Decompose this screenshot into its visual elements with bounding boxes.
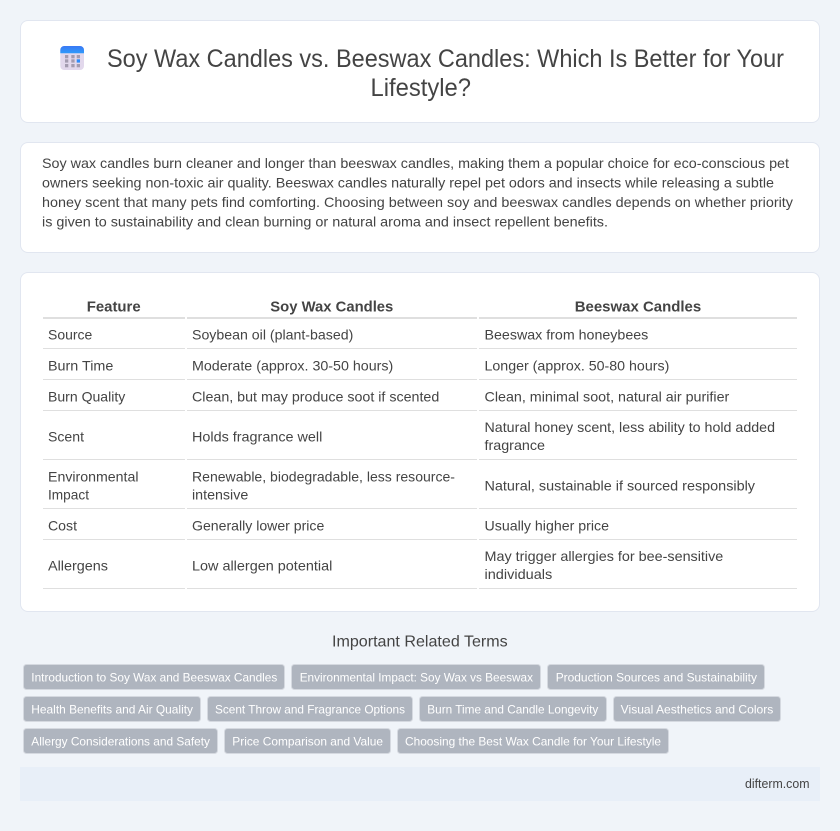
footer text: difterm.com — [745, 777, 810, 791]
table header: Beeswax Candles — [575, 299, 701, 316]
row: source — [48, 326, 648, 342]
text block: introduction: Soy wax candles burn cleaner and longer than beeswax candles, making them a popular choice for eco-conscious pet — [42, 155, 789, 171]
row: environmental impact: Environmental — [48, 468, 138, 484]
tag — [24, 728, 218, 754]
tag — [420, 696, 606, 722]
related term tags — [23, 664, 781, 754]
row: source: Soybean oil (plant-based) — [192, 326, 353, 342]
tag: Price Comparison and Value — [232, 735, 383, 749]
tag: Allergy Considerations and Safety — [31, 735, 210, 749]
heading: related terms: Important Related Terms — [332, 634, 508, 651]
row: allergens: May trigger allergies for bee-sensitive — [484, 548, 724, 564]
row: burn time: Moderate (approx. 30-50 hours) — [192, 357, 393, 373]
row: environmental impact: Natural, sustainable if sourced responsibly — [484, 477, 755, 493]
tag: Scent Throw and Fragrance Options — [215, 703, 405, 717]
table header: Feature — [87, 299, 141, 316]
text block: introduction — [42, 155, 793, 230]
text block: introduction: honey scent that many pets find comforting. Choosing between soy and beeswax candles depends on whether priority — [42, 194, 793, 210]
tag — [208, 696, 412, 722]
table rows — [48, 326, 775, 582]
tag: Production Sources and Sustainability — [556, 671, 757, 685]
row: scent: Scent — [48, 428, 84, 444]
text block: introduction: is given to sustainability and clean burning or natural aroma and insect repellent benefits. — [42, 213, 608, 229]
tag: Choosing the Best Wax Candle for Your Lifestyle — [405, 735, 661, 749]
footer bar — [20, 767, 820, 801]
title: Soy Wax Candles vs. Beeswax Candles: Which Is Better for Your — [107, 45, 784, 73]
panel: comparison table — [20, 272, 820, 612]
row: allergens: Allergens — [48, 557, 108, 573]
tag: Visual Aesthetics and Colors — [621, 703, 773, 717]
title — [107, 45, 784, 102]
row: environmental impact: intensive — [192, 486, 249, 502]
row: allergens: individuals — [484, 566, 552, 582]
row: burn time: Burn Time — [48, 357, 114, 373]
row: environmental impact — [48, 468, 755, 502]
row: allergens: Low allergen potential — [192, 557, 332, 573]
tag — [614, 696, 780, 722]
tag — [398, 728, 668, 754]
row: burn quality: Clean, minimal soot, natural air purifier — [484, 388, 730, 404]
row: allergens — [48, 548, 724, 582]
title: Lifestyle? — [370, 74, 471, 102]
row: scent: Holds fragrance well — [192, 428, 322, 444]
table rules — [43, 317, 797, 589]
row: burn quality — [48, 388, 730, 404]
tag — [224, 728, 390, 754]
table header — [87, 299, 701, 316]
text block: introduction: owners seeking non-toxic air quality. Beeswax candles naturally repel pet odors and insects while releasing a subtle — [42, 174, 774, 190]
tag: Burn Time and Candle Longevity — [427, 703, 598, 717]
row: scent: Natural honey scent, less ability to hold added — [484, 419, 775, 435]
tag: Introduction to Soy Wax and Beeswax Candles — [31, 671, 277, 685]
row: cost: Generally lower price — [192, 517, 325, 533]
row: burn time: Longer (approx. 50-80 hours) — [484, 357, 669, 373]
row: source: Source — [48, 326, 93, 342]
tag — [548, 664, 764, 690]
row: cost: Usually higher price — [484, 517, 609, 533]
row: scent — [48, 419, 775, 453]
row: burn quality: Burn Quality — [48, 388, 125, 404]
row: cost — [48, 517, 609, 533]
tag — [292, 664, 540, 690]
row: source: Beeswax from honeybees — [484, 326, 648, 342]
panel: header — [20, 20, 820, 123]
row: burn quality: Clean, but may produce soot if scented — [192, 388, 439, 404]
table header: Soy Wax Candles — [270, 299, 393, 316]
panel: introduction — [20, 142, 820, 253]
row: burn time — [48, 357, 669, 373]
tag — [24, 696, 200, 722]
row: environmental impact: Renewable, biodegradable, less resource- — [192, 468, 455, 484]
row: cost: Cost — [48, 517, 77, 533]
tag — [24, 664, 284, 690]
row: environmental impact: Impact — [48, 486, 89, 502]
row: scent: fragrance — [484, 437, 545, 453]
tag: Environmental Impact: Soy Wax vs Beeswax — [300, 671, 533, 685]
tag: Health Benefits and Air Quality — [31, 703, 193, 717]
icon: calendar — [60, 46, 84, 70]
